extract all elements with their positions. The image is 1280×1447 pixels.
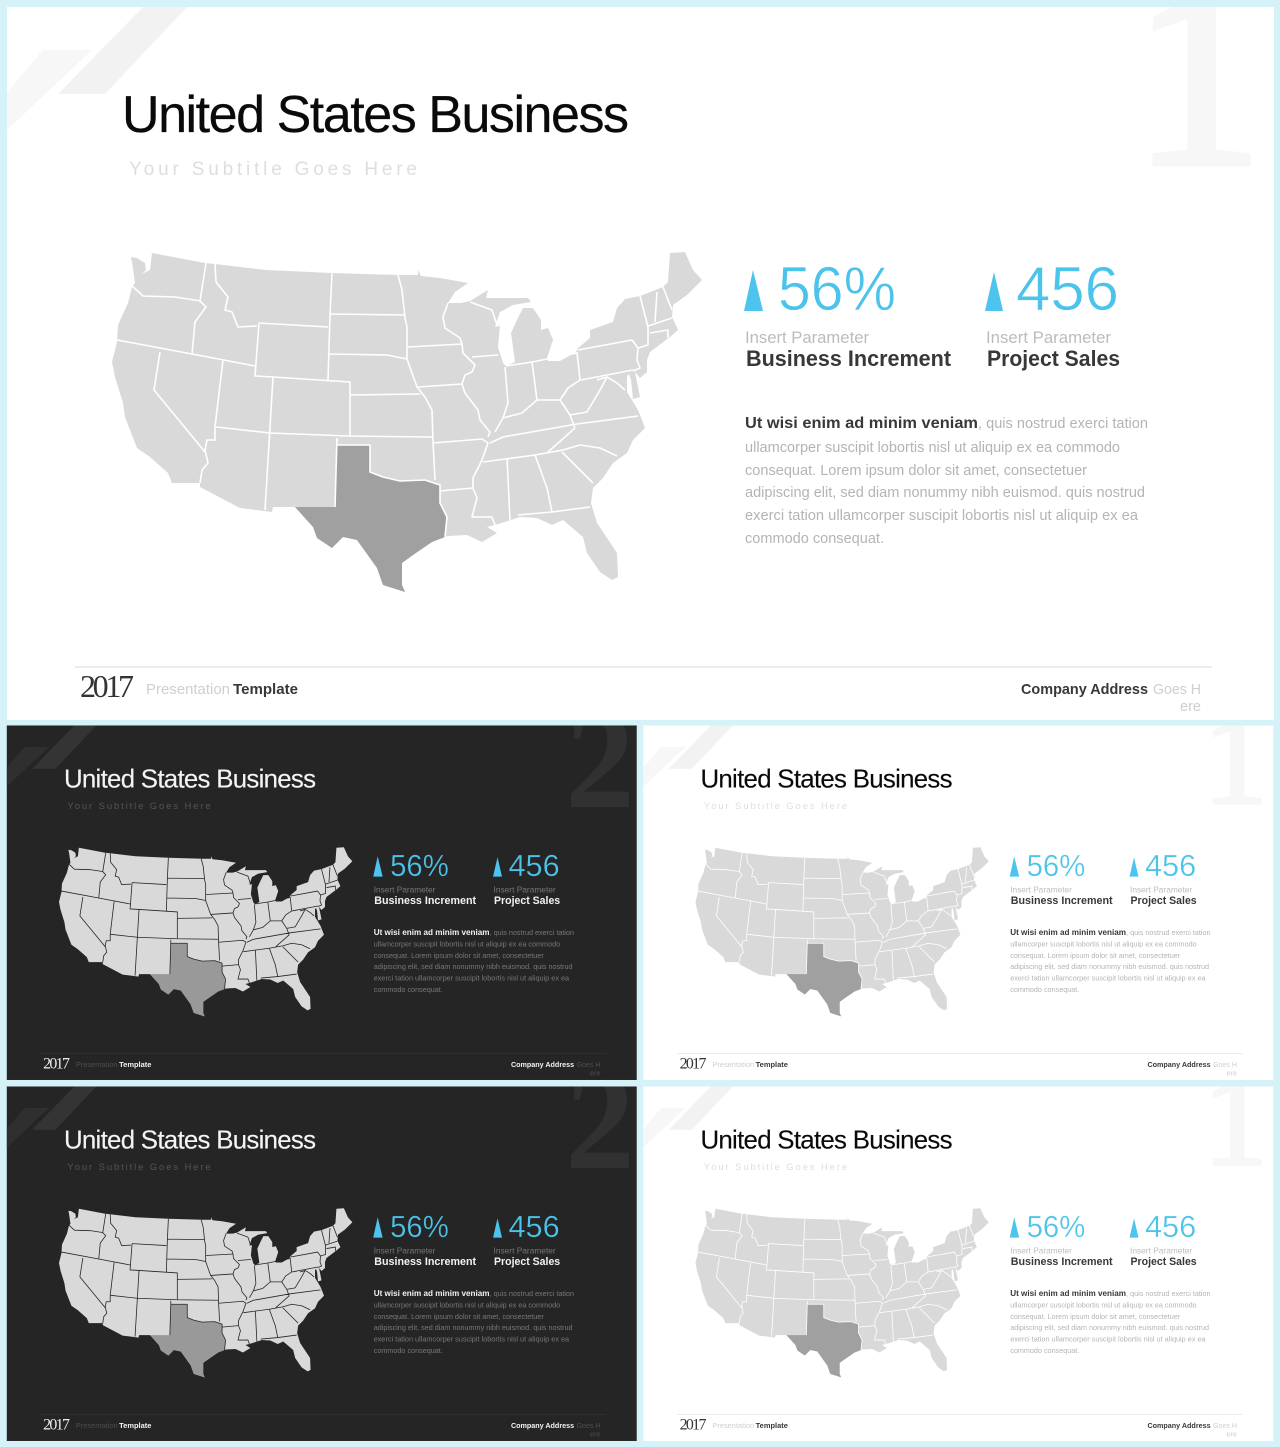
stat: 56% business increment bbox=[744, 255, 952, 371]
body text: exerci tation ullamcorper suscipit lobortis nisl ut aliquip ex ea bbox=[745, 508, 1139, 524]
title: United States Business bbox=[700, 766, 953, 794]
subtitle: Your Subtitle Goes Here bbox=[67, 1162, 211, 1173]
subtitle: Your Subtitle Goes Here bbox=[67, 801, 211, 812]
footer: ere bbox=[1226, 1430, 1237, 1439]
body text: , quis nostrud exerci tation bbox=[1126, 928, 1211, 937]
panel: small light slide, row 2: 1 bbox=[1203, 1049, 1268, 1192]
map: United States with Texas highlighted bbox=[59, 847, 352, 1016]
stat: 56% business increment: Insert Parameter bbox=[1010, 1246, 1072, 1256]
stat: 56% business increment: Insert Parameter bbox=[374, 885, 436, 895]
stat: 56% business increment: Insert Parameter bbox=[745, 328, 869, 347]
footer: ere bbox=[1226, 1069, 1237, 1078]
stat: 456 project sales: 456 bbox=[508, 848, 560, 883]
body text bbox=[1010, 1289, 1211, 1355]
title: United States Business bbox=[64, 1127, 316, 1155]
body text: ullamcorper suscipit lobortis nisl ut aliquip ex ea commodo bbox=[374, 940, 560, 949]
footer: Goes H bbox=[1153, 681, 1201, 698]
title: United States Business bbox=[700, 1127, 953, 1155]
body text bbox=[1010, 928, 1211, 994]
footer: Company Address bbox=[511, 1060, 574, 1069]
footer bbox=[41, 1054, 606, 1078]
stat: 56% business increment: Business Increment bbox=[1011, 895, 1113, 907]
body text: consequat. Lorem ipsum dolor sit amet, consectetuer bbox=[745, 463, 1087, 479]
stat: 456 project sales bbox=[1130, 1209, 1197, 1268]
footer: Template bbox=[756, 1421, 788, 1430]
title: United States Business bbox=[64, 766, 316, 794]
body text: consequat. Lorem ipsum dolor sit amet, consectetuer bbox=[1010, 1312, 1181, 1321]
body text: ullamcorper suscipit lobortis nisl ut aliquip ex ea commodo bbox=[1010, 940, 1197, 949]
footer: Goes H bbox=[1213, 1421, 1237, 1430]
body text: commodo consequat. bbox=[1010, 985, 1079, 994]
body text: , quis nostrud exerci tation bbox=[978, 416, 1148, 432]
body text: , quis nostrud exerci tation bbox=[490, 1289, 574, 1298]
footer: Presentation bbox=[712, 1060, 754, 1069]
stat: 456 project sales bbox=[493, 1209, 560, 1268]
stat: 56% business increment: 56% bbox=[390, 1209, 449, 1244]
body text: ullamcorper suscipit lobortis nisl ut aliquip ex ea commodo bbox=[1010, 1301, 1197, 1310]
body text: , quis nostrud exerci tation bbox=[1126, 1289, 1211, 1298]
map: United States with Texas highlighted bbox=[695, 847, 989, 1016]
body text: Ut wisi enim ad minim veniam bbox=[374, 928, 490, 937]
body text: commodo consequat. bbox=[374, 1346, 443, 1355]
stat: 456 project sales: Project Sales bbox=[494, 1256, 560, 1268]
body text: exerci tation ullamcorper suscipit lobortis nisl ut aliquip ex ea bbox=[374, 1335, 569, 1344]
body text: Ut wisi enim ad minim veniam bbox=[745, 415, 978, 432]
panel: small dark slide, row 2 bbox=[6, 1086, 637, 1441]
stat: 56% business increment: 56% bbox=[390, 848, 449, 883]
body text: commodo consequat. bbox=[1010, 1346, 1079, 1355]
footer: 2017 bbox=[43, 1417, 70, 1434]
footer: Presentation bbox=[76, 1060, 118, 1069]
stat: 56% business increment: 56% bbox=[778, 255, 896, 324]
footer: Template bbox=[119, 1060, 151, 1069]
footer: Presentation bbox=[76, 1421, 118, 1430]
stat: 56% business increment: Business Increment bbox=[374, 895, 476, 907]
panel: small dark slide, row 1: 2 bbox=[565, 684, 635, 838]
body text: consequat. Lorem ipsum dolor sit amet, consectetuer bbox=[374, 1312, 544, 1321]
body text: exerci tation ullamcorper suscipit lobortis nisl ut aliquip ex ea bbox=[374, 974, 569, 983]
footer: 2017 bbox=[680, 1056, 706, 1073]
footer: Template bbox=[233, 681, 298, 698]
stat: 456 project sales: Insert Parameter bbox=[494, 1246, 556, 1256]
stat: 456 project sales: 456 bbox=[1145, 1209, 1196, 1244]
footer: Template bbox=[756, 1060, 788, 1069]
footer bbox=[677, 1054, 1242, 1078]
stat: 456 project sales: Project Sales bbox=[1131, 895, 1197, 907]
footer bbox=[677, 1415, 1242, 1439]
map: United States with Texas highlighted bbox=[695, 1208, 989, 1377]
footer: ere bbox=[590, 1430, 600, 1439]
body text bbox=[374, 1289, 574, 1355]
body text: adipiscing elit, sed diam nonummy nibh euismod. quis nostrud bbox=[745, 485, 1145, 501]
panel: small dark slide, row 2: 2 bbox=[565, 1045, 635, 1199]
body text: adipiscing elit, sed diam nonummy nibh euismod. quis nostrud bbox=[1010, 962, 1209, 971]
body text bbox=[374, 928, 574, 994]
body text: , quis nostrud exerci tation bbox=[490, 928, 574, 937]
footer: Company Address bbox=[511, 1421, 574, 1430]
body text: ullamcorper suscipit lobortis nisl ut aliquip ex ea commodo bbox=[745, 440, 1120, 456]
body text: exerci tation ullamcorper suscipit lobortis nisl ut aliquip ex ea bbox=[1010, 1335, 1206, 1344]
panel: small dark slide, row 1 bbox=[6, 725, 637, 1080]
footer: 2017 bbox=[80, 668, 134, 704]
panel: large light slide bbox=[7, 0, 1274, 720]
footer: Goes H bbox=[577, 1060, 600, 1069]
stat: 456 project sales: Project Sales bbox=[987, 346, 1120, 371]
panel: small light slide, row 2 bbox=[643, 1049, 1273, 1441]
footer: Template bbox=[119, 1421, 151, 1430]
panel: small light slide, row 1: 1 bbox=[1203, 688, 1268, 831]
stat: 456 project sales: Insert Parameter bbox=[986, 328, 1111, 347]
footer bbox=[41, 1415, 606, 1439]
body text: commodo consequat. bbox=[745, 531, 884, 547]
body text: Ut wisi enim ad minim veniam bbox=[1010, 928, 1126, 937]
stat: 56% business increment: Business Increment bbox=[1011, 1256, 1113, 1268]
body text: exerci tation ullamcorper suscipit lobortis nisl ut aliquip ex ea bbox=[1010, 974, 1206, 983]
stat: 456 project sales: 456 bbox=[508, 1209, 560, 1244]
body text: Ut wisi enim ad minim veniam bbox=[1010, 1289, 1126, 1298]
footer: Presentation bbox=[146, 681, 230, 698]
body text bbox=[745, 415, 1148, 547]
stat: 56% business increment: Business Increment bbox=[374, 1256, 476, 1268]
map: United States with Texas highlighted bbox=[59, 1208, 352, 1377]
stat: 456 project sales: 456 bbox=[1145, 848, 1196, 883]
footer: 2017 bbox=[680, 1417, 706, 1434]
footer: Goes H bbox=[1213, 1060, 1237, 1069]
body text: ullamcorper suscipit lobortis nisl ut aliquip ex ea commodo bbox=[374, 1301, 560, 1310]
body text: consequat. Lorem ipsum dolor sit amet, consectetuer bbox=[1010, 951, 1181, 960]
footer: ere bbox=[590, 1069, 600, 1078]
stat: 456 project sales bbox=[985, 255, 1120, 371]
body text: adipiscing elit, sed diam nonummy nibh euismod. quis nostrud bbox=[374, 962, 573, 971]
body text: commodo consequat. bbox=[374, 985, 443, 994]
footer: 2017 bbox=[43, 1056, 70, 1073]
footer: Presentation bbox=[712, 1421, 754, 1430]
subtitle: Your Subtitle Goes Here bbox=[704, 1162, 847, 1173]
stat: 56% business increment: Insert Parameter bbox=[374, 1246, 436, 1256]
footer: Company Address bbox=[1147, 1060, 1211, 1069]
body text: Ut wisi enim ad minim veniam bbox=[374, 1289, 490, 1298]
title: United States Business bbox=[122, 86, 629, 144]
stat: 56% business increment bbox=[373, 1209, 476, 1268]
body text: adipiscing elit, sed diam nonummy nibh euismod. quis nostrud bbox=[374, 1323, 573, 1332]
stat: 456 project sales bbox=[1130, 848, 1197, 907]
subtitle: Your Subtitle Goes Here bbox=[704, 801, 847, 812]
footer bbox=[75, 667, 1212, 715]
stat: 456 project sales: Project Sales bbox=[494, 895, 560, 907]
stat: 56% business increment: 56% bbox=[1027, 848, 1085, 883]
body text: adipiscing elit, sed diam nonummy nibh euismod. quis nostrud bbox=[1010, 1323, 1209, 1332]
footer: Goes H bbox=[577, 1421, 600, 1430]
stat: 56% business increment: 56% bbox=[1027, 1209, 1085, 1244]
subtitle: Your Subtitle Goes Here bbox=[129, 159, 417, 180]
body text: consequat. Lorem ipsum dolor sit amet, consectetuer bbox=[374, 951, 544, 960]
map: United States with Texas highlighted bbox=[112, 252, 702, 592]
stat: 56% business increment bbox=[373, 848, 476, 907]
stat: 56% business increment: Insert Parameter bbox=[1010, 885, 1072, 895]
stat: 56% business increment: Business Increment bbox=[746, 346, 952, 371]
stat: 456 project sales: Insert Parameter bbox=[1130, 885, 1192, 895]
footer: Company Address bbox=[1147, 1421, 1211, 1430]
stat: 456 project sales bbox=[493, 848, 560, 907]
stat: 456 project sales: 456 bbox=[1016, 255, 1119, 324]
panel: small light slide, row 1 bbox=[643, 688, 1273, 1080]
stat: 456 project sales: Insert Parameter bbox=[1130, 1246, 1192, 1256]
stat: 56% business increment bbox=[1010, 848, 1113, 907]
footer: Company Address bbox=[1021, 681, 1148, 698]
stat: 456 project sales: Project Sales bbox=[1131, 1256, 1197, 1268]
footer: ere bbox=[1180, 698, 1201, 715]
stat: 456 project sales: Insert Parameter bbox=[494, 885, 556, 895]
stat: 56% business increment bbox=[1010, 1209, 1113, 1268]
